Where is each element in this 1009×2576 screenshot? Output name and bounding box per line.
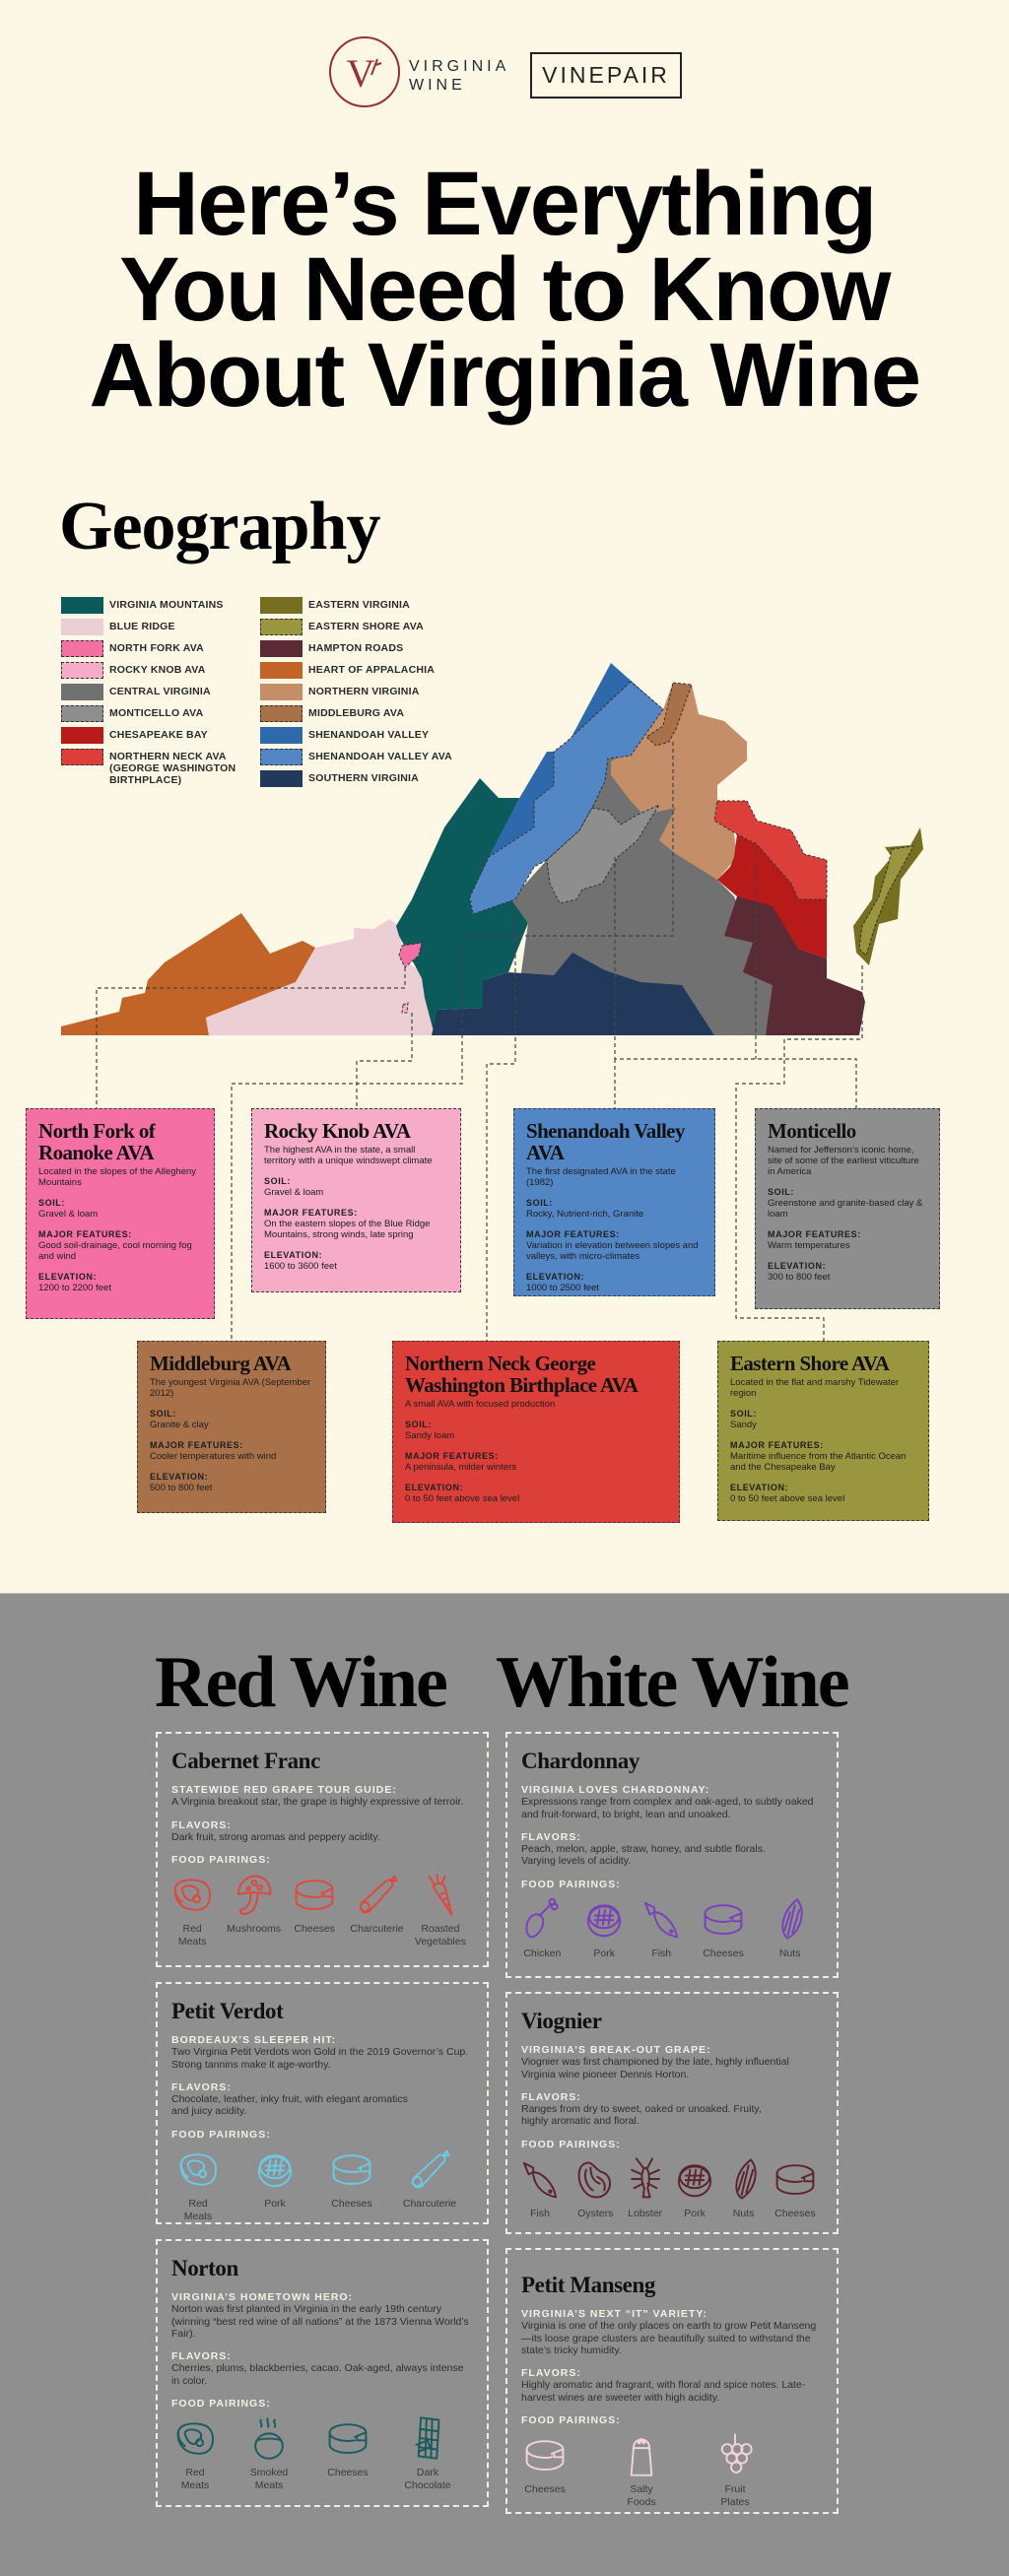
- icons: Cabernet Franc pairings: Vegetables: [415, 1936, 466, 1948]
- icons: Cabernet Franc pairings: Mushrooms: [227, 1923, 281, 1935]
- icons: Petit Manseng pairings: Foods: [627, 2496, 656, 2508]
- legend: ROCKY KNOB AVA: [109, 664, 205, 676]
- panel: Viognier: [505, 1992, 839, 2234]
- panel: Petit Verdot: Petit Verdot: [171, 1999, 283, 2023]
- panel: Chardonnay: Expressions range from complex and oak-aged, to subtly oaked and fruit-forward, to bright, lean and unoaked. Peach, melon, apple, straw, honey, and subtle florals.: [521, 1796, 814, 1855]
- card: Northern Neck George Washington Birthplace AVA: Northern Neck George Washington Birthplace AVA: [405, 1352, 638, 1397]
- title: You Need to Know: [119, 239, 890, 340]
- card: Shenandoah Valley AVA: Shenandoah Valley AVA: [526, 1119, 685, 1164]
- panel: Petit Manseng: [505, 2248, 839, 2514]
- panel: Cabernet Franc: Cabernet Franc: [171, 1749, 320, 1773]
- panel: Norton: Norton: [171, 2256, 238, 2280]
- card: Eastern Shore AVA: SOIL:: [730, 1409, 757, 1419]
- icons: Norton pairings: Cheeses: [327, 2467, 369, 2478]
- logo: VinePair: VINEPAIR: [542, 62, 670, 88]
- panel: Petit Verdot: BORDEAUX’S SLEEPER HIT:: [171, 2034, 336, 2046]
- icons: Viognier pairings: [522, 2157, 816, 2219]
- panel: Petit Verdot: FOOD PAIRINGS:: [171, 2129, 271, 2141]
- card: Monticello: Monticello: [768, 1119, 856, 1143]
- logo: Virginia Wine: [329, 36, 509, 107]
- card: Monticello: ELEVATION:: [768, 1261, 826, 1271]
- legend: NORTHERN NECK AVA: [109, 751, 227, 762]
- icons: Cabernet Franc pairings: Cheeses: [294, 1923, 335, 1935]
- legend: BIRTHPLACE): [109, 774, 181, 786]
- card: Shenandoah Valley AVA: The first designated AVA in the state (1982) Rocky, Nutrient-rich, Granite Variation in elevation between slopes and valleys, with micro-climates 1000 to 2500 feet: [526, 1166, 699, 1293]
- card: Middleburg AVA: ELEVATION:: [150, 1472, 208, 1482]
- card: North Fork of Roanoke AVA: SOIL:: [38, 1198, 65, 1208]
- card: Monticello: [755, 1108, 940, 1309]
- legend: [61, 597, 452, 787]
- card: Eastern Shore AVA: ELEVATION:: [730, 1483, 788, 1492]
- icons: Chardonnay pairings: Cheeses: [703, 1948, 744, 1959]
- card: North Fork of Roanoke AVA: North Fork of Roanoke AVA: [38, 1119, 155, 1164]
- icons: Petit Manseng pairings: Plates: [720, 2496, 750, 2508]
- title: Here’s Everything: [133, 154, 876, 254]
- card: Middleburg AVA: Middleburg AVA: [150, 1352, 291, 1375]
- icons: Viognier pairings: Lobster: [628, 2208, 662, 2219]
- panel: Cabernet Franc: A Virginia breakout star, the grape is highly expressive of terroir. Dark fruit, strong aromas and peppery acidity.: [171, 1796, 463, 1843]
- card: Eastern Shore AVA: MAJOR FEATURES:: [730, 1440, 824, 1450]
- logo: Virginia Wine: V: [347, 51, 375, 96]
- card: Rocky Knob AVA: SOIL:: [264, 1176, 291, 1186]
- icons: Norton pairings: [177, 2416, 451, 2491]
- legend: EASTERN VIRGINIA: [308, 599, 410, 611]
- panel: Viognier: highly aromatic and floral.: [521, 2115, 639, 2127]
- panel: Norton: Norton was first planted in Virginia in the early 19th century (winning “best red wine of all nations” at the 1873 Vienna World’s Fair). Cherries, plums, blackberries, cacao. Oak-aged, always intense in color.: [171, 2303, 469, 2387]
- legend: HEART OF APPALACHIA: [308, 664, 435, 676]
- panel: Cabernet Franc: FOOD PAIRINGS:: [171, 1854, 271, 1866]
- heading: Geography: Geography: [59, 489, 379, 564]
- icons: Norton pairings: Meats: [255, 2479, 283, 2491]
- card: Middleburg AVA: [137, 1341, 326, 1513]
- card: Shenandoah Valley AVA: SOIL:: [526, 1198, 553, 1208]
- legend: SHENANDOAH VALLEY: [308, 729, 429, 741]
- panel: Petit Manseng: FLAVORS:: [521, 2367, 581, 2379]
- panel: Petit Verdot: Two Virginia Petit Verdots won Gold in the 2019 Governor’s Cup. Strong tannins make it age-worthy. Chocolate, leather, inky fruit, with elegant aromatics: [171, 2046, 468, 2105]
- card: Northern Neck George Washington Birthplace AVA: SOIL:: [405, 1420, 432, 1429]
- panel: Chardonnay: Chardonnay: [521, 1749, 639, 1773]
- card: Shenandoah Valley AVA: ELEVATION:: [526, 1272, 584, 1282]
- title: About Virginia Wine: [89, 325, 919, 426]
- panel: Petit Verdot: FLAVORS:: [171, 2081, 232, 2093]
- legend: HAMPTON ROADS: [308, 642, 403, 654]
- card: Rocky Knob AVA: MAJOR FEATURES:: [264, 1208, 358, 1218]
- card: North Fork of Roanoke AVA: ELEVATION:: [38, 1272, 97, 1282]
- icons: Cabernet Franc pairings: Charcuterie: [350, 1923, 404, 1935]
- icons: Petit Verdot pairings: Red: [188, 2198, 208, 2210]
- panel: Viognier: Viognier was first championed by the late, highly influential Virginia wine pioneer Dennis Horton. Ranges from dry to sweet, oaked or unoaked. Fruity,: [521, 2056, 789, 2115]
- panel: Chardonnay: FLAVORS:: [521, 1831, 581, 1843]
- icons: Chardonnay pairings: Nuts: [779, 1948, 800, 1959]
- panel: Cabernet Franc: STATEWIDE RED GRAPE TOUR GUIDE:: [171, 1784, 397, 1796]
- card: North Fork of Roanoke AVA: Located in the slopes of the Allegheny Mountains Gravel & loam Good soil-drainage, cool morning fog and wind 1200 to 2200 feet: [38, 1166, 196, 1293]
- icons: Petit Manseng pairings: Fruit: [725, 2483, 745, 2495]
- logo: Virginia Wine: VIRGINIA: [409, 58, 509, 75]
- icons: Norton pairings: Dark: [417, 2467, 438, 2478]
- card: Rocky Knob AVA: ELEVATION:: [264, 1250, 322, 1260]
- panel: Chardonnay: [505, 1732, 839, 1978]
- map of Virginia regions: [61, 663, 923, 1341]
- icons: Viognier pairings: Fish: [530, 2208, 550, 2219]
- legend: MIDDLEBURG AVA: [308, 707, 404, 719]
- panel: Norton: FOOD PAIRINGS:: [171, 2398, 271, 2410]
- legend: NORTH FORK AVA: [109, 642, 204, 654]
- panel: Viognier: VIRGINIA’S BREAK-OUT GRAPE:: [521, 2044, 711, 2056]
- icons: Petit Manseng pairings: [524, 2433, 753, 2508]
- legend: (GEORGE WASHINGTON: [109, 762, 235, 774]
- panel: Viognier: FLAVORS:: [521, 2091, 581, 2103]
- legend: BLUE RIDGE: [109, 621, 175, 632]
- icons: Cabernet Franc pairings: Roasted: [421, 1923, 459, 1935]
- panel: Chardonnay: VIRGINIA LOVES CHARDONNAY:: [521, 1784, 709, 1796]
- legend: NORTHERN VIRGINIA: [308, 686, 420, 697]
- icons: Petit Verdot pairings: Pork: [264, 2198, 286, 2210]
- panel: Petit Verdot: and juicy acidity.: [171, 2105, 246, 2117]
- wine section background: [0, 1593, 1009, 2576]
- card: Monticello: MAJOR FEATURES:: [768, 1229, 861, 1239]
- panel: Norton: FLAVORS:: [171, 2350, 232, 2362]
- icons: Chardonnay pairings: [523, 1897, 803, 1959]
- icons: Cabernet Franc pairings: Meats: [178, 1936, 206, 1948]
- icons: Petit Manseng pairings: Salty: [630, 2483, 653, 2495]
- panel: Petit Manseng: Virginia is one of the only places on earth to grow Petit Manseng—its loose grape clusters are beautifully suited to withstand the state’s tricky humidity. Highly aromatic and fragrant, with floral and spice notes. Late-harvest wines are sweeter with high acidity.: [521, 2320, 816, 2404]
- card: Rocky Knob AVA: Rocky Knob AVA: [264, 1119, 410, 1143]
- card: Middleburg AVA: MAJOR FEATURES:: [150, 1440, 243, 1450]
- legend: CHESAPEAKE BAY: [109, 729, 208, 741]
- card: Rocky Knob AVA: The highest AVA in the state, a small territory with a unique windswept climate Gravel & loam On the eastern slopes of the Blue Ridge Mountains, strong winds, late spring 1600 to 3600 feet: [264, 1145, 433, 1272]
- icons: Petit Manseng pairings: Cheeses: [524, 2483, 566, 2495]
- icons: Petit Verdot pairings: Charcuterie: [403, 2198, 456, 2210]
- card: Shenandoah Valley AVA: [513, 1108, 715, 1296]
- card: Monticello: Named for Jefferson’s iconic home, site of some of the earliest viticulture in America Greenstone and granite-based clay & loam Warm temperatures 300 to 800 feet: [768, 1145, 922, 1283]
- panel: Petit Manseng: FOOD PAIRINGS:: [521, 2414, 621, 2426]
- card: Middleburg AVA: The youngest Virginia AVA (September 2012) Granite & clay Cooler temperatures with wind 500 to 800 feet: [150, 1377, 310, 1493]
- legend: VIRGINIA MOUNTAINS: [109, 599, 224, 611]
- panel: Petit Manseng: VIRGINIA’S NEXT “IT” VARIETY:: [521, 2308, 707, 2320]
- legend: SOUTHERN VIRGINIA: [308, 772, 419, 784]
- title: [89, 154, 919, 426]
- logo: VinePair: [530, 52, 682, 99]
- panel: Cabernet Franc: FLAVORS:: [171, 1819, 232, 1831]
- card: Eastern Shore AVA: Located in the flat and marshy Tidewater region Sandy Maritime influence from the Atlantic Ocean and the Chesapeake Bay 0 to 50 feet above sea level: [730, 1377, 906, 1504]
- card: Northern Neck George Washington Birthplace AVA: MAJOR FEATURES:: [405, 1451, 499, 1461]
- panel: Chardonnay: FOOD PAIRINGS:: [521, 1879, 621, 1890]
- icons: Viognier pairings: Pork: [684, 2208, 706, 2219]
- card: North Fork of Roanoke AVA: MAJOR FEATURES:: [38, 1229, 132, 1239]
- card: Middleburg AVA: SOIL:: [150, 1409, 176, 1419]
- heading: Red Wine: Red Wine: [155, 1642, 446, 1723]
- legend: EASTERN SHORE AVA: [308, 621, 424, 632]
- panel: Petit Manseng: Petit Manseng: [521, 2273, 655, 2297]
- icons: Norton pairings: Chocolate: [404, 2479, 451, 2491]
- icons: Viognier pairings: Cheeses: [774, 2208, 816, 2219]
- panel: Viognier: Viognier: [521, 2009, 602, 2033]
- logo: Virginia Wine: WINE: [409, 77, 466, 94]
- icons: Petit Verdot pairings: [179, 2149, 456, 2222]
- card: North Fork of Roanoke AVA: [26, 1108, 215, 1319]
- card: Eastern Shore AVA: [717, 1341, 929, 1521]
- icons: Norton pairings: Red: [185, 2467, 205, 2478]
- icons: Norton pairings: Meats: [181, 2479, 209, 2491]
- heading: White Wine: White Wine: [496, 1642, 848, 1723]
- icons: Cabernet Franc pairings: [173, 1874, 466, 1948]
- icons: Petit Verdot pairings: Meats: [184, 2211, 212, 2222]
- icons: Chardonnay pairings: Pork: [593, 1948, 615, 1959]
- icons: Viognier pairings: Oysters: [577, 2208, 613, 2219]
- panel: Petit Verdot: [156, 1982, 489, 2224]
- panel: Cabernet Franc: [156, 1732, 489, 1967]
- legend: SHENANDOAH VALLEY AVA: [308, 751, 452, 762]
- card: Shenandoah Valley AVA: MAJOR FEATURES:: [526, 1229, 620, 1239]
- icons: Petit Verdot pairings: Cheeses: [331, 2198, 372, 2210]
- panel: Viognier: FOOD PAIRINGS:: [521, 2139, 621, 2150]
- card: Northern Neck George Washington Birthplace AVA: A small AVA with focused production Sandy loam A peninsula, milder winters 0 to 50 feet above sea level: [405, 1399, 555, 1504]
- icons: Norton pairings: Smoked: [250, 2467, 288, 2478]
- legend: MONTICELLO AVA: [109, 707, 203, 719]
- panel: Chardonnay: Varying levels of acidity.: [521, 1855, 631, 1867]
- card: Monticello: SOIL:: [768, 1187, 794, 1197]
- card: Northern Neck George Washington Birthplace AVA: ELEVATION:: [405, 1483, 463, 1492]
- card: Rocky Knob AVA: [251, 1108, 461, 1292]
- icons: Chardonnay pairings: Chicken: [523, 1948, 561, 1959]
- icons: Viognier pairings: Nuts: [733, 2208, 754, 2219]
- icons: Cabernet Franc pairings: Red: [182, 1923, 202, 1935]
- icons: Chardonnay pairings: Fish: [651, 1948, 671, 1959]
- panel: Norton: [156, 2239, 489, 2507]
- card: Eastern Shore AVA: Eastern Shore AVA: [730, 1352, 889, 1375]
- panel: Norton: VIRGINIA’S HOMETOWN HERO:: [171, 2291, 353, 2303]
- legend: CENTRAL VIRGINIA: [109, 686, 211, 697]
- card: Northern Neck George Washington Birthplace AVA: [392, 1341, 680, 1523]
